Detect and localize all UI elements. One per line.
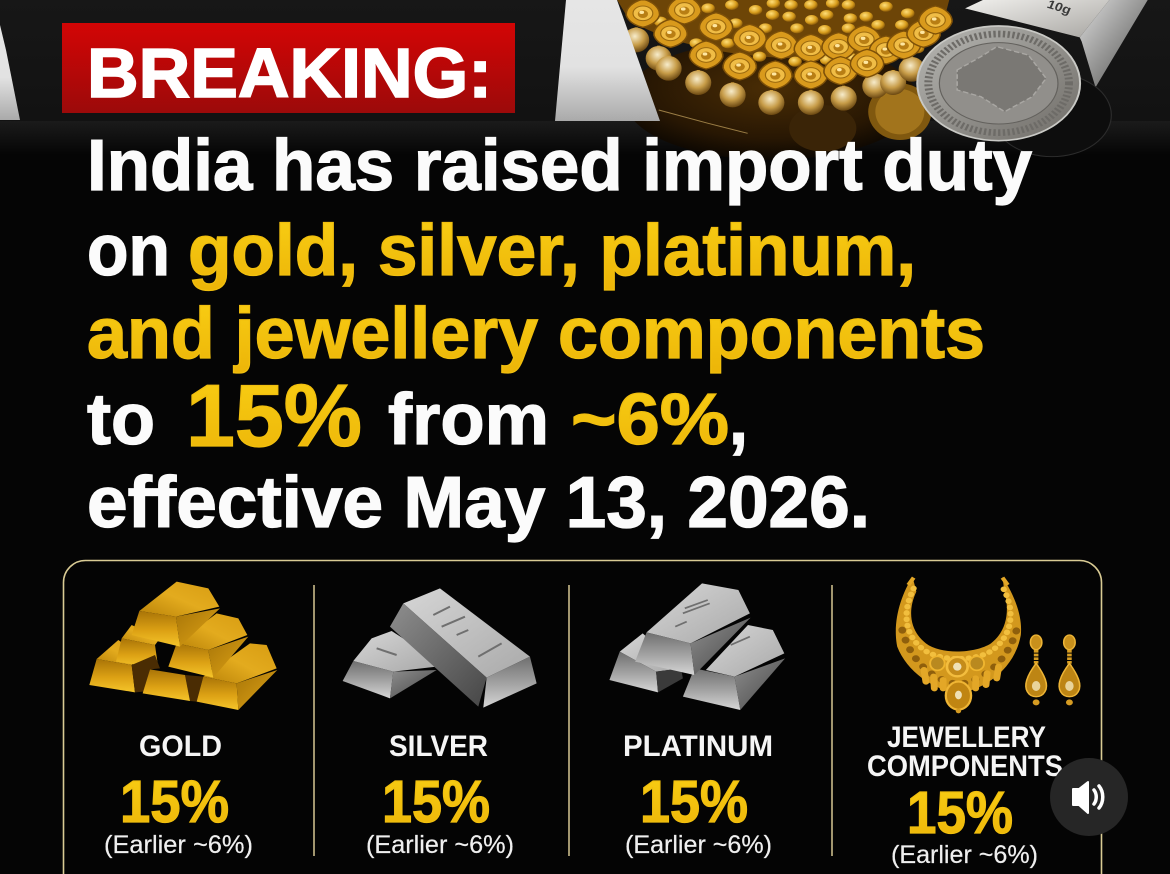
note: silver earlier rate: (Earlier ~6%) — [366, 831, 514, 859]
earring right — [1059, 635, 1080, 705]
icon: platinum bars — [609, 583, 785, 710]
label: jewellery components: COMPONENTS — [867, 750, 1063, 783]
label: gold: GOLD — [139, 730, 222, 763]
label: jewellery components — [867, 721, 1063, 783]
column: silver — [343, 588, 537, 859]
note: platinum earlier rate: (Earlier ~6%) — [625, 831, 772, 859]
header photo: jewellery, coin and silver bar — [0, 0, 1170, 160]
icon: silver bars — [343, 588, 537, 708]
icon: speaker button — [1050, 758, 1128, 836]
label: silver: SILVER — [389, 730, 488, 763]
value: jewellery duty: 15% — [907, 780, 1013, 846]
label: jewellery components: JEWELLERY — [887, 721, 1046, 754]
icon: gold necklace and earrings — [896, 577, 1080, 713]
silver bar in the header — [965, 0, 1148, 87]
headline: ~6% — [571, 380, 729, 460]
earring left — [1026, 635, 1047, 705]
headline: 15% — [186, 366, 362, 465]
headline — [87, 126, 1032, 543]
BREAKING badge: BREAKING: — [87, 34, 492, 112]
headline: effective May 13, 2026. — [87, 463, 870, 543]
headline: on — [87, 211, 170, 291]
note: jewellery earlier rate: (Earlier ~6%) — [891, 841, 1038, 869]
headline: India has raised import duty — [87, 126, 1032, 206]
value: platinum duty: 15% — [640, 769, 748, 835]
column: platinum — [609, 583, 785, 859]
label: platinum: PLATINUM — [623, 730, 773, 763]
column: jewellery components — [867, 577, 1080, 869]
headline: and jewellery components — [87, 294, 985, 374]
note: gold earlier rate: (Earlier ~6%) — [104, 831, 253, 859]
coins — [917, 26, 1111, 157]
comparison panel — [64, 560, 1102, 874]
headline: gold, silver, platinum, — [188, 211, 916, 291]
headline: , — [729, 380, 748, 460]
value: silver duty: 15% — [382, 769, 490, 835]
column: gold — [89, 582, 277, 859]
headline: from — [388, 380, 549, 460]
icon: gold bars — [89, 582, 277, 710]
value: gold duty: 15% — [120, 769, 229, 835]
headline: to — [87, 380, 155, 460]
